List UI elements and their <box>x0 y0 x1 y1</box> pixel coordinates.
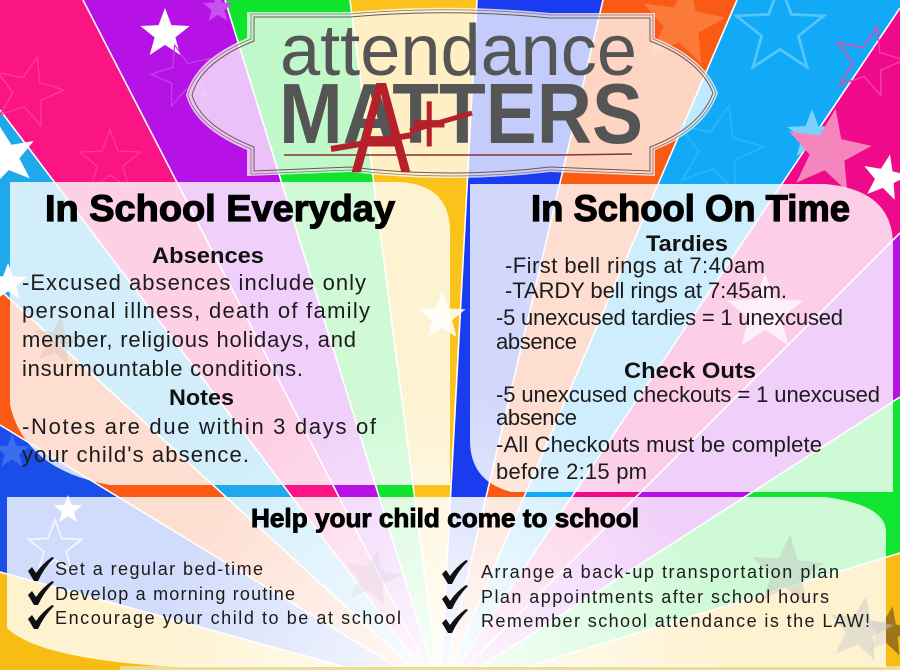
red grade A+ <box>331 57 472 200</box>
text: absences rules: personal illness, death of family <box>22 298 370 323</box>
subheading: notes: Notes <box>169 385 234 410</box>
text: tardies rules: absence <box>496 329 577 354</box>
text: absences rules: -Excused absences include only <box>22 270 366 295</box>
subheading: absences: Absences <box>152 243 264 268</box>
text: tardies rules: -5 unexcused tardies = 1 unexcused <box>496 305 843 330</box>
text: check outs rules: absence <box>496 405 577 430</box>
checklist: right: Remember school attendance is the LAW! <box>481 611 870 631</box>
checklist: left: Develop a morning routine <box>55 584 295 604</box>
plaque <box>186 8 718 178</box>
panel: in school everyday <box>10 182 466 485</box>
checklist: right: Arrange a back-up transportation plan <box>481 562 839 582</box>
heading: in school on time: In School On Time <box>531 188 850 229</box>
checklist: right: Plan appointments after school hours <box>481 587 829 607</box>
text: tardies rules: -First bell rings at 7:40am <box>505 253 765 278</box>
red grade A+: + <box>411 73 447 174</box>
left panel background <box>10 182 450 485</box>
panel: in school on time <box>470 184 893 492</box>
text: notes rules: your child's absence. <box>22 442 249 467</box>
text: check outs rules: -5 unexcused checkouts = 1 unexcused <box>496 382 880 407</box>
text: notes rules: -Notes are due within 3 days of <box>22 414 377 439</box>
heading: in school everyday: In School Everyday <box>45 188 395 229</box>
text: absences rules: member, religious holidays, and <box>22 327 356 352</box>
right panel background <box>470 184 893 492</box>
red grade A+: A <box>352 57 410 200</box>
word: attendance: attendance <box>280 11 637 91</box>
text: notes rules <box>22 414 377 467</box>
text: tardies rules: -TARDY bell rings at 7:45am. <box>505 278 787 303</box>
heading: help your child: Help your child come to school <box>251 503 639 533</box>
panel: help your child come to school <box>7 495 898 667</box>
checklist: right <box>442 560 870 633</box>
text: check outs rules: -All Checkouts must be complete <box>496 432 822 457</box>
bottom panel background <box>7 497 886 667</box>
checklist: left <box>28 557 401 629</box>
subheading: tardies: Tardies <box>646 231 728 256</box>
subheading: check outs: Check Outs <box>624 358 756 383</box>
text: absences rules <box>22 270 370 381</box>
text: check outs rules: before 2:15 pm <box>496 459 647 484</box>
text: absences rules: insurmountable conditions. <box>22 356 303 381</box>
title banner: attendance matters <box>186 8 718 200</box>
checklist: left: Encourage your child to be at school <box>55 608 401 628</box>
text: check outs rules <box>496 382 880 484</box>
word: matters: MATTERS <box>279 67 643 162</box>
underline stroke <box>284 154 632 155</box>
checklist: left: Set a regular bed-time <box>55 559 263 579</box>
text: tardies rules <box>496 253 843 354</box>
